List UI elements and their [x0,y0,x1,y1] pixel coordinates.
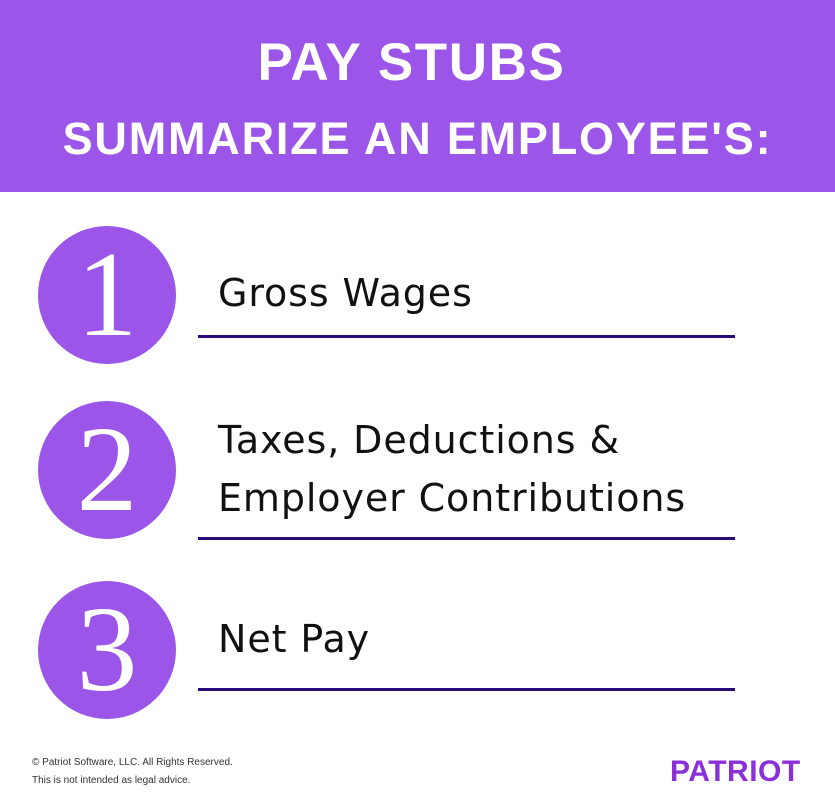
header banner [0,0,835,192]
item 1 underline [198,335,735,338]
subtitle: SUMMARIZE AN EMPLOYEE'S: [63,113,772,164]
footer text: This is not intended as legal advice. [32,775,190,786]
item 2 underline [198,537,735,540]
logo: PATRIOT [670,755,801,788]
item 1 text: Gross Wages [218,271,473,315]
item 2 text: Employer Contributions [218,476,686,520]
title: PAY STUBS [258,33,565,92]
item 2 number circle [38,401,176,539]
item 3 text: Net Pay [218,617,370,661]
item 3 underline [198,688,735,691]
footer text [32,757,233,786]
item 2 text [218,418,686,520]
item 1 number circle [38,226,176,364]
footer text: © Patriot Software, LLC. All Rights Reserved. [32,757,233,768]
item 3 number circle: 3 [76,582,138,717]
item 1 number circle: 1 [76,227,138,362]
item 3 number circle [38,581,176,719]
item 2 number circle: 2 [76,402,138,537]
item 2 text: Taxes, Deductions & [218,418,620,462]
